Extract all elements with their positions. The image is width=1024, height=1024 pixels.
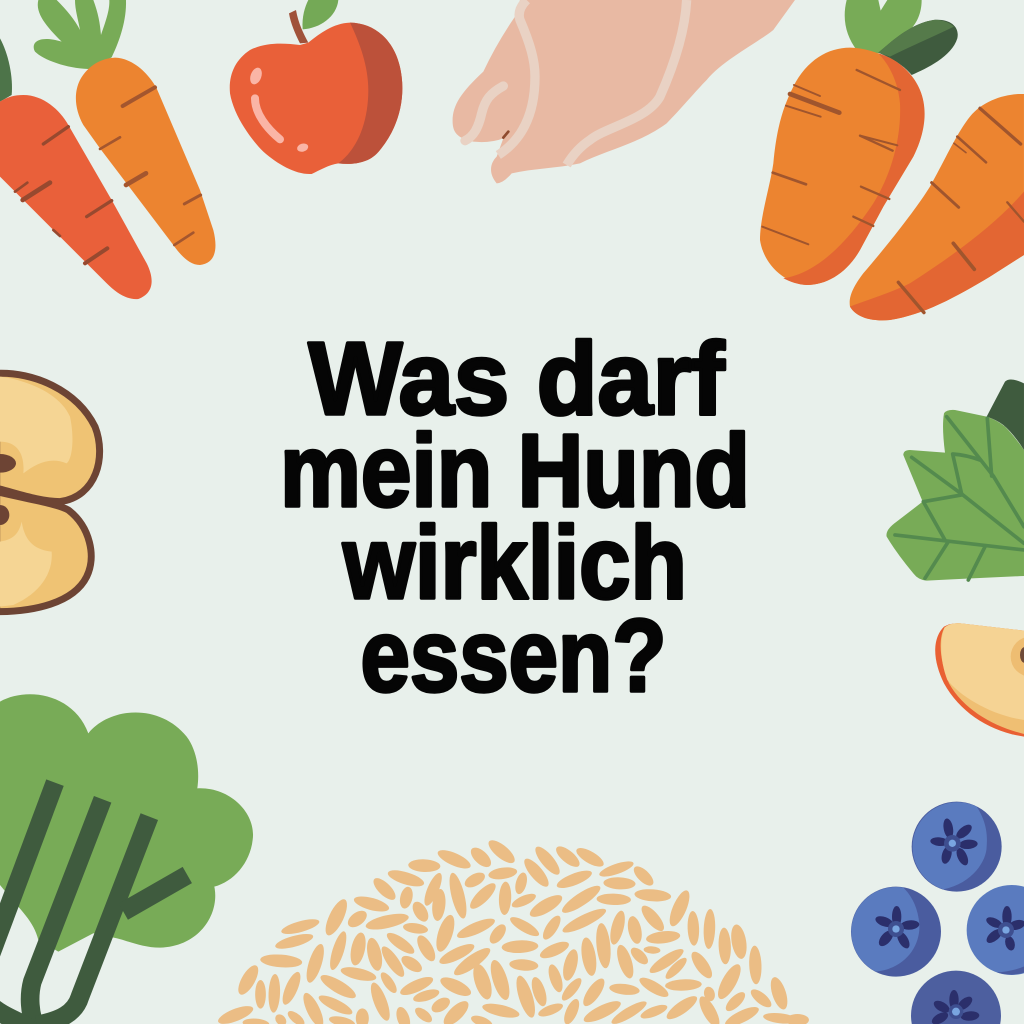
icon: chicken breast	[453, 0, 795, 183]
icon: apple wedge right	[935, 623, 1024, 737]
icon: large carrot top-right	[760, 0, 958, 285]
title	[280, 321, 750, 713]
icon: blueberry top	[912, 802, 1002, 892]
icon: apple slices left	[0, 373, 100, 612]
icon: broccoli bottom-left	[0, 694, 253, 1024]
title: essen?	[360, 598, 666, 713]
title: wirklich	[342, 505, 687, 620]
icon: blueberry left	[851, 887, 941, 977]
icon: blueberries	[851, 802, 1024, 1024]
icon: blueberry bottom	[911, 971, 1001, 1024]
icon: rice mound	[215, 837, 809, 1024]
icon: large carrot right edge	[850, 94, 1024, 320]
title: mein Hund	[280, 413, 750, 528]
icon: carrot top-left, red	[0, 38, 152, 299]
title: Was darf	[308, 321, 725, 436]
icon: apple	[230, 0, 402, 174]
icon: blueberry right	[967, 885, 1024, 975]
icon: carrot top-left, orange	[34, 0, 215, 265]
icon: leafy green right	[886, 380, 1024, 581]
